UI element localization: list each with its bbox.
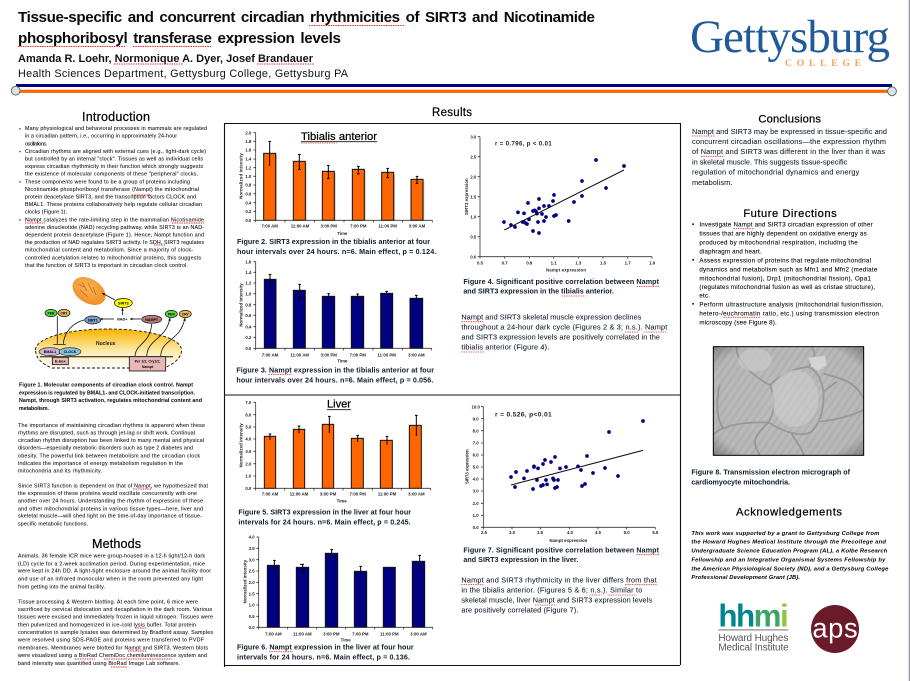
text block: methods: then pulverized and homogenized in ice-cold lysis buffer. Total protein [18,622,196,628]
text block: introduction bullets: BMAL1. These proteins collaboratively help regulate cellular circadian [25,202,202,208]
bar chart: figure 3 Nampt: Time [337,359,348,364]
text block: methods: membranes. Membranes were blotted for Nampt and SIRT3. Western blots [18,645,208,651]
text block: methods: Tissue processing & Western blotting. At each time point, 6 mice were [18,599,198,605]
gene box: target genes: Per 1/2, Cry1/2, [135,360,160,364]
text block: conclusions: in skeletal muscle. This suggests tissue-specific [692,157,848,166]
bar chart: figure 3 Nampt: Normalized Intensity [238,283,243,327]
bar chart: figure 3 Nampt: 7:00 PM [349,353,366,358]
text block: conclusions: concurrent circadian oscillations—the expression rhythm [692,137,886,146]
bar chart: figure 2 SIRT3: Time [337,231,348,236]
bar chart: figure 5 SIRT3: 0.0 [245,486,252,491]
protein: Nampt: NAMPT [145,318,159,322]
bar chart: figure 6 Nampt: 2.5 [249,569,255,574]
scatter plot: figure 4: 0.0 [470,254,477,259]
text block: methods: were kept in 24h DD. A light-tight enclosure around the animal facility door [18,569,211,575]
scatter plot: figure 7: 2.0 [473,501,479,506]
text block: future directions bullets: tissues that are highly dependent on oxidative energy as [699,231,867,238]
bar chart: figure 6 Nampt: Normalized Intensity [242,559,247,603]
bar chart: figure 3 Nampt: 0.2 [245,335,252,340]
bar chart: figure 3 Nampt: 1.4 [245,270,252,275]
text block: introduction bullets: the existence of molecular components of these "peripheral" clocks. [25,172,198,178]
scatter plot: figure 7: 4.5 [595,530,602,535]
scatter plot: figure 4: r = 0.796, p < 0.01 [495,142,552,148]
text block: introduction paragraphs: indicates the importance of energy metabolism regulation in the [18,461,183,467]
logo: HHMI: hhmi [718,599,789,634]
panel: tibialis anterior bar charts [236,130,436,384]
text block: introduction paragraphs: Since SIRT3 function is dependent on that of Nampt, we hypothesized that [18,483,209,489]
gene box: E-Box: E-box [55,360,66,364]
icon: mitochondrion [67,271,111,311]
text block: liver findings: Nampt and SIRT3 rhythmicity in the liver differs from that [461,576,657,585]
text block: tibialis findings: Nampt and SIRT3 skeletal muscle expression declines [461,313,642,322]
text block: methods: concentration in sample lysates was determined by Bradford assay. Samples [18,630,213,636]
bar chart: figure 2 SIRT3: 0.0 [245,218,252,223]
caption: figure 3: hour intervals over 24 hours. n=6. Main effect, p = 0.056. [236,376,433,384]
bar chart: figure 2 SIRT3: 3:00 AM [409,223,426,228]
bar chart: figure 3 Nampt: 11:00 PM [377,353,396,358]
bar chart: figure 3 Nampt: 1.0 [245,291,252,296]
text block: introduction bullets: Nampt catalyzes the rate-limiting step in the mammalian Nicotinamide [25,217,204,223]
scatter plot: figure 7: 4.0 [567,530,574,535]
logo: Gettysburg College: Gettysburg [690,11,890,63]
scatter plot: figure 4: SIRT3 expression [464,178,469,215]
scatter plot: figure 4: 1.0 [470,214,477,219]
caption: figure 7 [463,546,660,564]
bar chart: figure 2 SIRT3: 11:00 AM [291,223,310,228]
text block: introduction bullets: but controlled by an internal "clock". Tissues as well as individual cells [25,156,203,162]
bar chart: figure 5 SIRT3: 3.0 [245,449,252,454]
bar chart: figure 2 SIRT3: 0.2 [245,209,252,214]
scatter plot: figure 4: 0.5 [470,234,477,239]
bar chart: figure 3 Nampt: 7:00 AM [262,353,279,358]
logo: HHMI: Howard Hughes [718,633,788,644]
protein: SIRT1: SIRT1 [88,318,98,322]
text block: methods: from getting into the animal facility. [18,584,105,590]
bar chart: figure 2 SIRT3: 1.2 [245,165,252,170]
bar chart: figure 5 SIRT3: Normalized Intensity [238,423,243,467]
caption: figure 5: Figure 5. SIRT3 expression in the liver at four hour [238,509,411,517]
bar chart: figure 2 SIRT3: 3:00 PM [320,223,337,228]
caption: figure 1 [19,383,202,412]
bar chart: figure 6 Nampt: 11:00 AM [293,631,312,636]
text block: liver findings: in the tibialis anterior. (Figures 5 & 6; n.s.). Similar to [461,586,642,595]
text block: future directions bullets: Perform ultrastructure analysis (mitochondrial fusion/fission, [699,301,884,308]
caption: figure 5: intervals for 24 hours. n=6. Main effect, p = 0.245. [238,519,411,527]
scatter plot: figure 4: 1.1 [551,261,557,266]
text block: introduction bullets: Circadian rhythms are aligned with external cues (e.g., light-dark cycle) [25,149,206,155]
text block: methods: were resolved using SDS-PAGE and proteins were transferred to PVDF [18,638,205,644]
text block: liver findings: skeletal muscle, liver Nampt and SIRT3 expression levels [461,596,652,605]
text block: conclusions: of Nampt and SIRT3 was different in the liver than it was [692,147,885,156]
text block: tibialis findings: and SIRT3 expression levels are positively correlated in the [461,333,660,342]
text block: introduction bullets: clocks (Figure 1). [25,210,67,216]
text block: introduction paragraphs: skeletal muscle—will shed light on the time-of-day importance of tissue- [18,514,202,520]
text block: acknowledgements: This work was supported by a grant to Gettysburg College from [691,531,879,537]
proteins: PER and CRY right: PER [168,312,175,316]
scatter plot: figure 4: 0.5 [477,261,484,266]
text block: acknowledgements [691,531,889,581]
bar chart: figure 2 SIRT3 [238,130,432,236]
text block: introduction bullets: express circadian rhythmicity in their function which strongly suggests [25,164,203,170]
protein: SIRT1 [85,316,101,324]
text block: methods: tissues were excised and immediately frozen in liquid nitrogen. Tissues were [18,615,213,621]
protein: SIRT3 [114,298,132,308]
text block: methods: band intensity was quantified using BioRad Image Lab software. [18,661,180,667]
authors: Amanda R. Loehr, Normonique A. Dyer, Josef Brandauer [18,53,314,65]
scatter plot: figure 4: 3.0 [470,134,477,139]
text block: liver findings: are positively correlated (Figure 7). [461,606,578,615]
text block: introduction paragraphs: specific metabolic functions. [18,521,88,527]
label: NAD+: NAD+ [117,317,128,321]
scatter plot: figure 7: SIRT3 expression [465,449,470,484]
text block: introduction bullets: dependent protein deacetylase (Figure 1). Hence, Nampt function and [25,233,204,239]
text block: introduction paragraphs: The importance of maintaining circadian rhythms is apparent when these [18,423,205,429]
bar chart: figure 2 SIRT3: 1.0 [245,174,252,179]
heading: Methods: Methods [92,537,141,551]
caption: figure 1: expression is regulated by BMAL1- and CLOCK-initiated transcription. [19,390,196,396]
header rule [11,84,896,96]
text block: introduction bullets: mitochondrial content and metabolism. Since a majority of clock- [25,248,193,254]
caption: figure 1: Nampt, through SIRT3 activation, regulates mitochondrial content and [19,398,202,404]
scatter plot: figure 4: 1.7 [625,261,631,266]
scatter plot: figure 4: 2.0 [470,174,477,179]
diagram: molecular clock [36,271,191,371]
bar chart: figure 2 SIRT3: 11:00 PM [378,223,397,228]
bar chart: figure 6 Nampt: 1.5 [249,591,255,596]
scatter plot: figure 7: 8.0 [473,428,479,433]
scatter plot: figure 4: 2.5 [470,154,477,159]
bar chart: figure 5 SIRT3: 2.0 [245,461,252,466]
text block: introduction bullets: oscillations. [25,141,47,147]
scatter plot: figure 7: 5.0 [473,465,479,470]
text block: tibialis findings [461,313,667,352]
bar chart: figure 5 SIRT3: 3:00 AM [408,491,425,496]
bar chart: figure 2 SIRT3: 0.6 [245,191,252,196]
protein: Nampt [142,315,162,323]
scatter plot: figure 7: 6.0 [473,453,479,458]
text block: acknowledgements: the Howard Hughes Medical Institute through the Precollege and [691,540,886,546]
protein: SIRT3: SIRT3 [118,302,129,306]
text block: future directions bullets: (regulates mitochondrial fusion as well as cristae structure), [699,284,875,291]
scatter plot: figure 4 [464,134,656,272]
bar chart: figure 6 Nampt: Time [341,638,351,643]
proteins: PER and CRY left: PER [48,311,55,315]
bar chart: figure 6 Nampt: 4.0 [249,535,255,540]
text block: methods [18,554,213,667]
text block: introduction bullets: in a circadian pattern, i.e., occurring in approximately 24-hour [25,134,177,140]
text block: tibialis findings: tibialis anterior (Figure 4). [461,343,549,352]
text block: introduction bullets: Nicotinamide phosphoribosyl transferase (Nampt) the mitochondrial [25,187,199,193]
text block: introduction paragraphs: circadian rhythm disruption has been linked to many mental and physical [18,438,204,444]
scatter plot: figure 7: 9.0 [473,416,479,421]
text block: future directions bullets: hetero-/euchromatin ratio, etc.) using transmission electron [699,310,880,317]
text block: future directions bullets: etc. [699,293,710,300]
logo: HHMI: Medical Institute [718,643,789,654]
gene box: E-Box [52,357,68,365]
bar chart: figure 6 Nampt: 2.0 [249,580,255,585]
text block: introduction bullets [19,126,207,269]
bar chart: figure 2 SIRT3: 2.0 [245,130,252,135]
scatter plot: figure 4: 0.9 [526,261,533,266]
label: Nucleus: Nucleus [96,341,116,347]
text block: methods: sacrificed by cervical dislocation and decapitation in the dark room. Various [18,607,212,613]
proteins: BMAL1 and CLOCK [39,348,81,356]
caption: figure 1: metabolism. [19,406,50,412]
bar chart: figure 2 SIRT3: 1.8 [245,139,252,144]
text block: introduction bullets: controlled acetylation relates to mitochondrial proteins, this suggests [25,255,201,261]
text block: conclusions [692,127,887,187]
logo: APS [811,605,859,653]
DNA strand [40,356,173,358]
text block: future directions bullets: Investigate Nampt and SIRT3 circadian expression of other [699,222,873,229]
text block: future directions bullets: produced by mitochondrial respiration, including the [699,240,858,247]
text block: acknowledgements: Undergraduate Science Education Program (AL), a Kolbe Research [691,549,888,555]
text block: introduction bullets: protein deacetylase SIRT3, and the transcription factors CLOCK and [25,195,196,201]
caption: figure 6 [237,644,414,662]
bar chart: figure 2 SIRT3: 1.4 [245,157,252,162]
text block: future directions bullets: diaphragm and heart. [699,249,762,256]
gene box: target genes [129,357,166,371]
bar chart: figure 5 SIRT3: 5.0 [245,425,252,430]
bar chart: figure 6 Nampt: 7:00 AM [265,631,282,636]
bar chart: figure 6 Nampt: 1.0 [249,603,255,608]
caption: figure 8: Figure 8. Transmission electron micrograph of [691,469,851,477]
panel: micrograph and acknowledgements [691,347,889,654]
heading: Future Directions: Future Directions [743,208,837,220]
bar chart: figure 2 SIRT3: 1.6 [245,148,252,153]
text block: introduction bullets: Many physiological and behavioral processes in mammals are regulated [25,126,207,132]
caption: figure 3: Figure 3. Nampt expression in the tibialis anterior at four [236,366,434,374]
scatter plot: figure 4: 0.7 [502,261,508,266]
bar chart: figure 5 SIRT3: Time [337,499,347,504]
text block: introduction paragraphs: obesity. The powerful link between metabolism and the circadian clock [18,453,200,459]
text block: future directions bullets: microscopy (see Figure 8). [699,319,777,326]
text block: methods: were visualized using a BioRad ChemiDoc chemiluminescence system and [18,653,207,659]
scatter plot: figure 4: 1.9 [649,261,656,266]
text block: acknowledgements: the American Physiological Society (ND), and a Gettysburg College [691,566,889,572]
logo: Gettysburg College: COLLEGE [785,59,861,69]
bar chart: figure 6 Nampt: 3.0 [249,557,255,562]
bar chart: figure 3 Nampt: 1.6 [245,259,252,264]
bar chart: figure 5 SIRT3: 3:00 PM [320,491,337,496]
bar chart: figure 3 Nampt [238,259,432,364]
heading: Acknowledgements: Acknowledgements [736,507,842,519]
scatter plot: figure 7: 10.0 [471,404,480,409]
text block: tibialis findings: throughout a 24-hour dark cycle (Figures 2 & 3; n.s.). Nampt [461,323,667,332]
panel: liver bar charts [237,399,433,662]
text block: acknowledgements: Professional Development Grant (JB). [691,575,800,581]
scatter plot: figure 7: 0.0 [473,525,479,530]
bar chart: figure 6 Nampt: 0.5 [249,614,255,619]
bar chart: figure 3 Nampt: 0.4 [245,324,252,329]
text block: introduction paragraphs: another over 24 hours. Understanding the rhythm of expression of these [18,499,203,505]
caption: figure 2: Figure 2. SIRT3 expression in the tibialis anterior at four [237,238,430,246]
bar chart: figure 2 SIRT3: Normalized Intensity [238,153,243,199]
bar chart: figure 5 SIRT3: 7.0 [245,400,252,405]
bar chart: figure 6 Nampt: 3:00 PM [323,631,340,636]
scatter plot: figure 7 [465,404,659,543]
text block: acknowledgements: Fellowship and an Integrative Organismal Systems Fellowship by [691,558,886,564]
bar chart: figure 5 SIRT3: 4.0 [245,437,252,442]
heading: Liver: Liver [327,399,351,411]
text block: introduction paragraphs: disorders—especially metabolic disorders such as type 2 diabetes and [18,446,193,452]
bar chart: figure 2 SIRT3: 7:00 PM [350,223,367,228]
panel: conclusions and future directions [692,114,887,326]
proteins: PER and CRY left: CRY [60,311,68,315]
text block: methods: and use of an infrared monocular when in the room prevented any light [18,576,204,582]
heading: Tibialis anterior: Tibialis anterior [301,131,377,143]
text block: methods: (LD) cycle for a 2-week acclimation period. During experimentation, mice [18,561,205,567]
bar chart: figure 6 Nampt: 7:00 PM [352,631,369,636]
proteins: BMAL1 and CLOCK: BMAL1 [44,350,56,354]
bar chart: figure 5 SIRT3: 11:00 AM [290,491,309,496]
gene box: target genes: Nampt [142,365,154,369]
bar chart: figure 5 SIRT3: 6.0 [245,412,252,417]
text block: introduction paragraphs: and other mitochondrial proteins in various tissue types—here, liver and [18,506,203,512]
heading: Results: Results [432,107,472,119]
text block: future directions bullets [692,222,884,326]
scatter plot: figure 4: 1.5 [600,261,607,266]
panel: liver correlation [461,404,660,615]
bar chart: figure 3 Nampt: 0.6 [245,313,252,318]
nucleus [36,329,182,368]
bar chart: figure 5 SIRT3: 1.0 [245,474,252,479]
scatter plot: figure 7: 5.5 [652,530,659,535]
proteins: PER and CRY right: CRY [182,312,190,316]
bar chart: figure 6 Nampt [242,535,433,643]
caption: figure 6: Figure 6. Nampt expression in the liver at four hour [237,644,414,652]
text block: introduction paragraphs: rhythms are disrupted, such as through jet-lag or shift work. Continual [18,430,195,436]
scatter plot: figure 4: 1.5 [470,194,477,199]
bar chart: figure 6 Nampt: 3:00 AM [410,631,427,636]
bar chart: figure 5 SIRT3: 7:00 PM [349,491,366,496]
bar chart: figure 6 Nampt: 0.0 [249,625,255,630]
text block: introduction paragraphs: the expression of these proteins would oscillate concurrently with one [18,491,197,497]
text block: future directions bullets: Assess expression of proteins that regulate mitochondrial [699,257,871,264]
bar chart: figure 3 Nampt: 0.0 [245,346,252,351]
text block: conclusions: Nampt and SIRT3 may be expressed in tissue-specific and [692,127,887,136]
title: phosphoribosyl transferase expression levels [18,30,341,47]
caption: figure 7: and SIRT3 expression in the liver. [463,556,578,564]
caption: figure 1: Figure 1. Molecular components of circadian clock control. Nampt [19,383,193,389]
text block: introduction bullets: that the function of SIRT3 is important in circadian clock control. [25,263,188,269]
scatter plot: figure 7: 7.0 [473,441,479,446]
text block: introduction bullets: adenine dinucleotide (NAD) recycling pathway, while SIRT3 is an NAD- [25,225,204,231]
scatter plot: figure 7: r = 0.526, p<0.01 [495,412,552,419]
caption: figure 7: Figure 7. Significant positive correlation between Nampt [463,546,660,554]
scatter plot: figure 7: 3.0 [473,489,479,494]
heading: Conclusions: Conclusions [758,114,821,126]
scatter plot: figure 7: 3.5 [537,530,544,535]
bar chart: figure 5 SIRT3: 7:00 AM [262,491,279,496]
proteins: BMAL1 and CLOCK: CLOCK [64,350,77,354]
image: transmission electron micrograph [713,347,864,455]
scatter plot: figure 7: 1.0 [473,513,479,518]
caption: figure 8 [691,469,851,487]
proteins: PER and CRY right [165,310,191,318]
text block: conclusions: metabolism. [692,178,732,187]
bar chart: figure 6 Nampt: 3.5 [249,546,255,551]
scatter plot: figure 4: 1.3 [575,261,582,266]
bar chart: figure 5 SIRT3: 11:00 PM [378,491,397,496]
caption: figure 6: intervals for 24 hours. n=6. Main effect, p = 0.136. [237,654,410,662]
caption: figure 5 [238,509,411,527]
bar chart: figure 5 SIRT3 [238,400,431,504]
logo: APS: aps [812,613,858,644]
scatter plot: figure 7: 5.0 [624,530,630,535]
bar chart: figure 3 Nampt: 3:00 AM [408,353,425,358]
affiliation: Health Sciences Department, Gettysburg College, Gettysburg PA [18,68,349,80]
heading: Introduction: Introduction [82,110,150,124]
caption: figure 8: cardiomyocyte mitochondria. [691,479,790,487]
scatter plot: figure 4: Nampt expression [546,267,586,272]
caption: figure 3 [236,366,434,384]
caption: figure 2: hour intervals over 24 hours. n=6. Main effect, p = 0.124. [237,248,436,256]
bar chart: figure 3 Nampt: 3:00 PM [320,353,337,358]
text block: liver findings [461,576,657,615]
caption: figure 4: Figure 4. Significant positive correlation between Nampt [463,278,660,286]
bar chart: figure 6 Nampt: 11:00 PM [380,631,399,636]
scatter plot: figure 7: Nampt expression [549,538,588,543]
bar chart: figure 3 Nampt: 0.8 [245,302,252,307]
caption: figure 2 [237,238,436,256]
text block: introduction paragraphs [18,423,209,527]
logo: HHMI [718,599,789,654]
scatter plot: figure 7: 2.5 [481,530,488,535]
text block: introduction bullets: the production of NAD regulates SIRT3 activity. In SDH, SIRT3 regulates [25,240,204,246]
text block: introduction paragraphs: mitochondria and its rhythmicity. [18,468,102,474]
caption: figure 4 [463,278,660,296]
text block: future directions bullets: mitochondrial fusion), Drp1 (mitochondrial fission), Opa1 [699,275,872,282]
title [18,9,595,47]
bar chart: figure 3 Nampt: 11:00 AM [290,353,309,358]
bar chart: figure 3 Nampt: 1.2 [245,281,252,286]
scatter plot: figure 7: 4.0 [473,477,479,482]
text block: conclusions: regulation of mitochondrial dynamics and energy [692,168,860,177]
text block: methods: Animals. 36 female ICR mice were group-housed in a 12-h light/12-h dark [18,554,205,560]
text block: introduction bullets: These components were found to be a group of proteins including [25,179,190,185]
panel: tibialis anterior correlation [461,134,667,352]
bar chart: figure 2 SIRT3: 7:00 AM [261,223,278,228]
bar chart: figure 2 SIRT3: 0.4 [245,200,252,205]
title: Tissue-specific and concurrent circadian rhythmicities of SIRT3 and Nicotinamide [18,9,595,26]
proteins: PER and CRY left [45,309,70,317]
text block: future directions bullets: dynamics and metabolism such as Mfn1 and Mfn2 (mediate [699,266,878,273]
scatter plot: figure 7: 3.0 [509,530,516,535]
caption: figure 4: and SIRT3 expression in the tibialis anterior. [463,288,614,296]
bar chart: figure 2 SIRT3: 0.8 [245,183,252,188]
